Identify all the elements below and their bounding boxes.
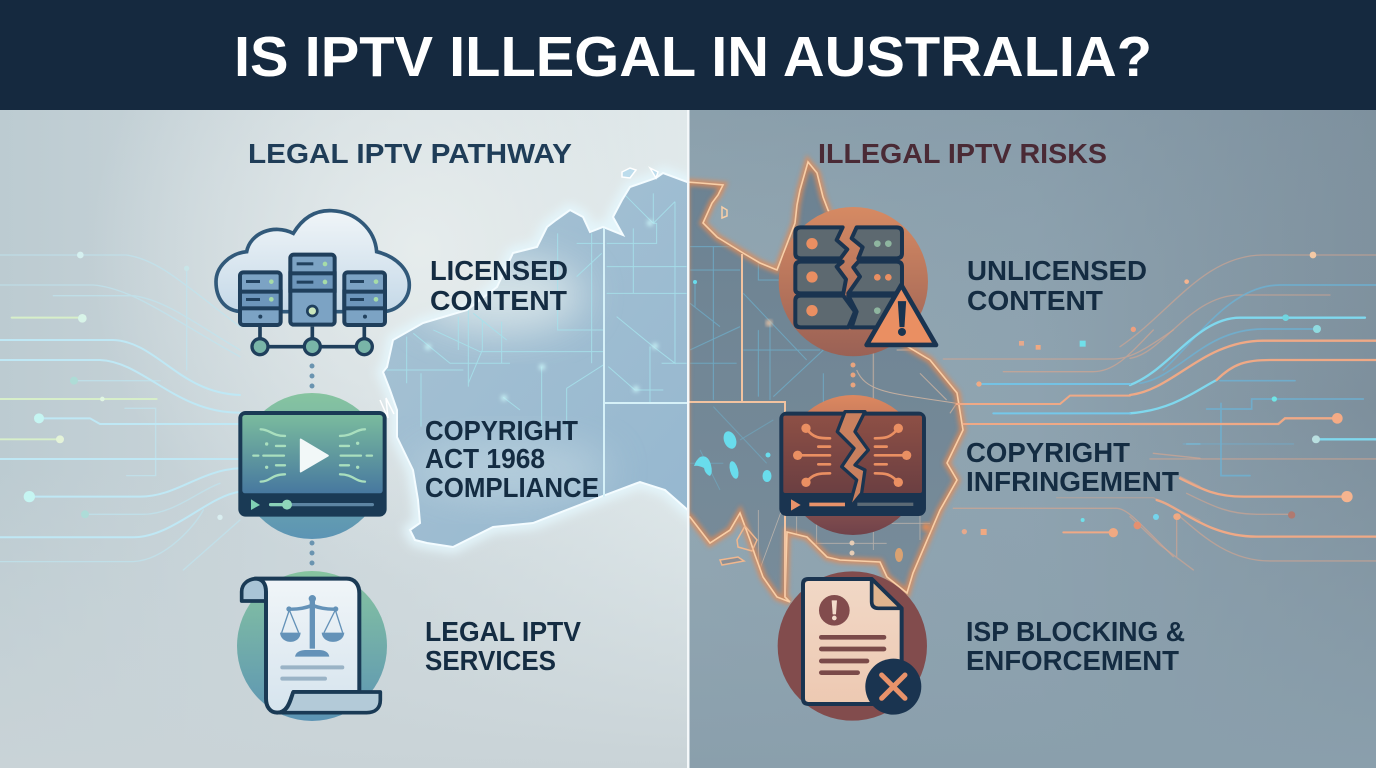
label: legal iptv services (425, 616, 582, 676)
map: eastern Australia in orange (686, 162, 963, 602)
circuit lines: legal side (0, 252, 240, 570)
heading: illegal risks: ILLEGAL IPTV RISKS (818, 138, 1107, 169)
connector dots: illegal 1 (850, 362, 856, 388)
label: copyright infringement: INFRINGEMENT (966, 466, 1179, 497)
circuit lines: illegal side, far right (1120, 252, 1376, 570)
label: licensed content: CONTENT (430, 285, 567, 316)
label: isp blocking and enforcement (966, 616, 1185, 676)
icon: cracked video player (779, 395, 926, 535)
icon: video player (238, 393, 387, 539)
label: copyright act 1968 compliance: COPYRIGHT (425, 415, 578, 446)
label: licensed content (430, 255, 568, 316)
icon: legal scroll with scales (237, 571, 387, 721)
label: copyright act 1968 compliance (425, 415, 599, 503)
label: copyright infringement (966, 437, 1179, 497)
heading: legal pathway: LEGAL IPTV PATHWAY (248, 138, 572, 169)
panel: illegal side background (689, 110, 1376, 768)
divider (687, 110, 690, 768)
map: western Australia in blue (380, 168, 690, 547)
connector dots: legal 1 (310, 364, 314, 388)
label: legal iptv services: SERVICES (425, 645, 556, 676)
label: unlicensed content (967, 255, 1147, 316)
label: unlicensed content: UNLICENSED (967, 255, 1147, 286)
icon: broken server with warning (779, 207, 936, 356)
panel: legal side background (0, 110, 688, 768)
label: legal iptv services: LEGAL IPTV (425, 616, 582, 647)
connector dots: legal 2 (310, 540, 314, 566)
title: IS IPTV ILLEGAL IN AUSTRALIA? (234, 25, 1152, 89)
label: unlicensed content: CONTENT (967, 285, 1103, 316)
label: copyright act 1968 compliance: ACT 1968 (425, 443, 545, 474)
label: isp blocking and enforcement: ISP BLOCKING & (966, 616, 1185, 647)
label: licensed content: LICENSED (430, 255, 568, 286)
title banner (0, 0, 1376, 110)
icon: enforcement notice (778, 571, 927, 721)
icon: cloud servers (216, 211, 409, 355)
circuit lines: illegal side, near map (943, 330, 1200, 557)
label: copyright infringement: COPYRIGHT (966, 437, 1130, 468)
label: isp blocking and enforcement: ENFORCEMENT (966, 645, 1179, 676)
connector dots: illegal 2 (850, 540, 854, 556)
label: copyright act 1968 compliance: COMPLIANCE (425, 472, 599, 503)
